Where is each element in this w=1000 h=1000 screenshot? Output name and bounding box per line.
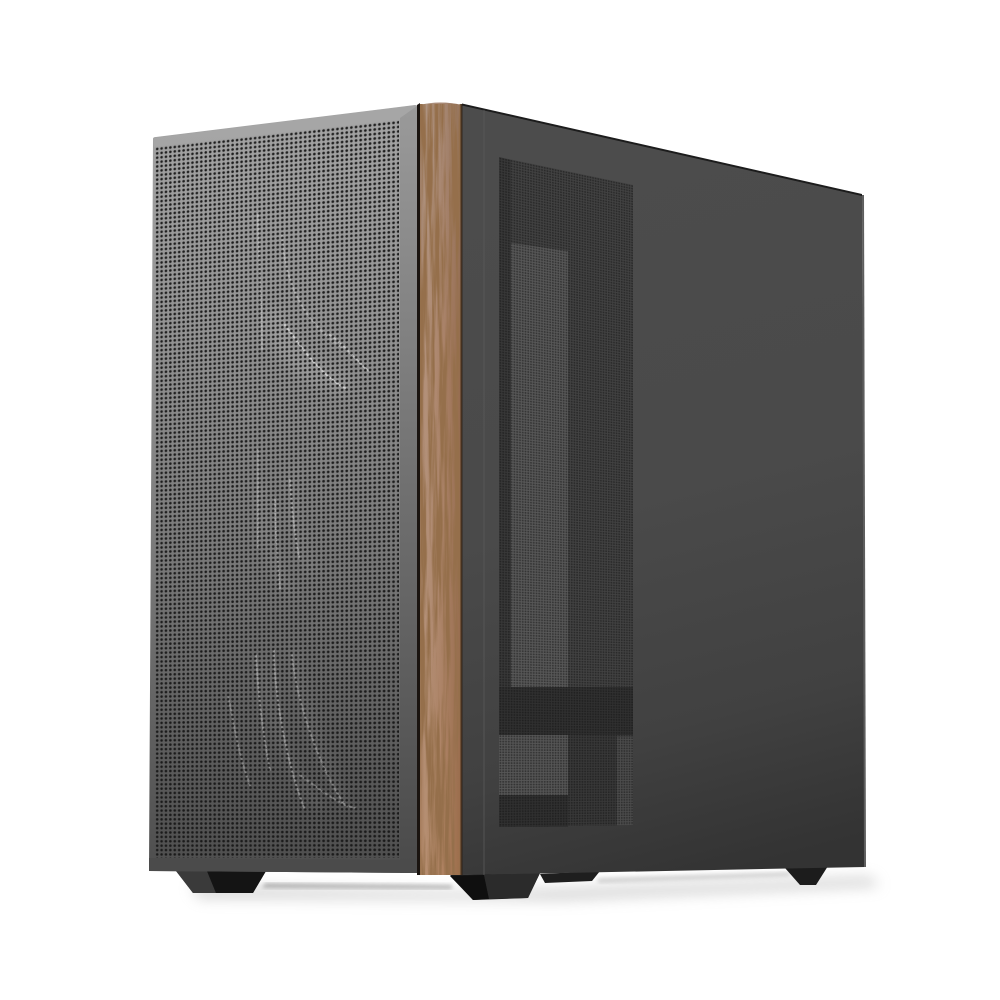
interior: lower band	[499, 795, 568, 827]
frame right strip	[400, 106, 417, 873]
interior: PSU	[499, 735, 568, 795]
foot: rear right	[785, 866, 828, 885]
side panel right edge	[862, 195, 866, 867]
interior: left cable channel	[499, 157, 511, 687]
panel: side	[462, 104, 866, 875]
front panel outer gap	[417, 103, 420, 875]
foot: rear hidden	[540, 871, 600, 883]
frame highlight top	[153, 105, 417, 147]
side vent interior dark	[499, 157, 633, 827]
interior: lower right	[617, 737, 633, 825]
fan blade highlight edges	[228, 215, 370, 810]
side mesh perforation	[500, 158, 633, 827]
interior: divider band	[499, 687, 633, 735]
front panel base	[149, 105, 417, 873]
floor shadow	[190, 872, 880, 900]
interior: motherboard area	[511, 243, 568, 687]
side panel surface	[462, 104, 865, 875]
foot: front corner	[450, 873, 540, 900]
side panel inner seam	[483, 110, 485, 875]
panel: front mesh	[149, 103, 420, 875]
foot: front left	[176, 871, 266, 893]
wood trim	[420, 102, 462, 875]
interior: center column	[568, 735, 617, 826]
frame bottom strip	[149, 858, 417, 873]
side panel top edge	[462, 104, 862, 196]
front mesh perforation	[156, 120, 399, 858]
fan blades behind the mesh	[262, 320, 345, 805]
